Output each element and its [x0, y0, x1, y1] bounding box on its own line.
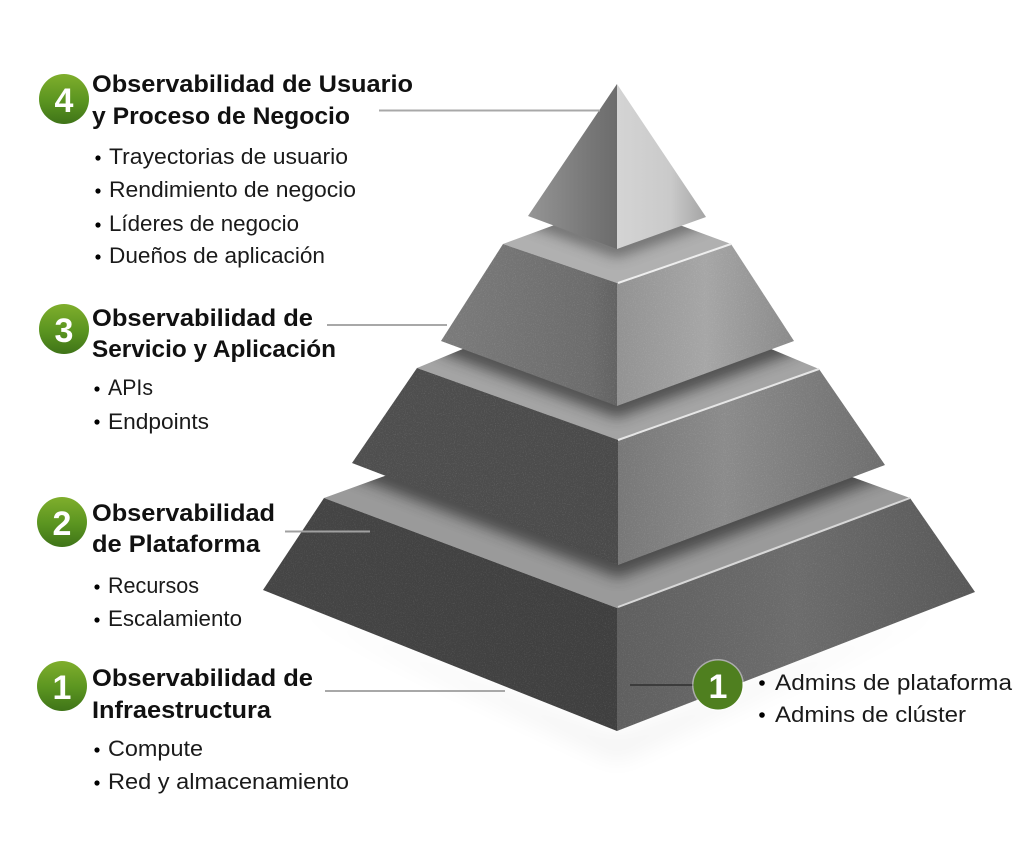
heading 3	[92, 305, 336, 363]
badge 1: 1	[53, 669, 71, 707]
tier 1: infrastructure	[263, 392, 975, 731]
heading 2	[92, 500, 275, 558]
tier 2: platform	[352, 349, 885, 565]
leader lines	[285, 110, 695, 691]
heading 1: Infraestructura	[92, 697, 272, 724]
heading 4: Observabilidad de Usuario	[92, 71, 413, 98]
heading 4	[92, 71, 413, 130]
list 2: Escalamiento	[108, 606, 242, 631]
list 3	[94, 375, 209, 434]
heading 2: Observabilidad	[92, 500, 275, 527]
badge 2: 2	[53, 505, 71, 543]
admin list: Admins de clúster	[775, 702, 966, 727]
badge 4: 4	[55, 82, 74, 120]
badge 2	[37, 497, 87, 547]
list 4	[95, 144, 356, 268]
tier 4: user and business apex	[528, 84, 706, 249]
badge 3: 3	[55, 312, 73, 350]
admin list: Admins de plataforma	[775, 670, 1013, 695]
badge 4	[39, 74, 89, 124]
list 4: Trayectorias de usuario	[109, 144, 348, 169]
list 4: Líderes de negocio	[109, 211, 299, 236]
heading 2: de Plataforma	[92, 531, 261, 558]
heading 1: Observabilidad de	[92, 665, 313, 692]
callout: tier 1 administrators	[692, 659, 1013, 727]
badge 3	[39, 304, 89, 354]
admin list	[759, 670, 1013, 727]
section 3: service and application observability	[39, 304, 336, 434]
pyramid	[263, 84, 975, 760]
list 3: Endpoints	[108, 409, 209, 434]
heading 4: y Proceso de Negocio	[92, 103, 350, 130]
heading 3: Servicio y Aplicación	[92, 336, 336, 363]
list 4: Rendimiento de negocio	[109, 177, 356, 202]
heading 3: Observabilidad de	[92, 305, 313, 332]
list 2	[94, 573, 242, 631]
list 2: Recursos	[108, 573, 199, 598]
list 3: APIs	[108, 375, 153, 400]
section 1: infrastructure observability	[37, 661, 349, 794]
tier 3: service	[441, 226, 794, 406]
badge 1	[37, 661, 87, 711]
badge 1 right	[692, 659, 744, 711]
list 1	[94, 736, 349, 794]
list 1: Red y almacenamiento	[108, 769, 349, 794]
list 1: Compute	[108, 736, 203, 761]
badge 1 right: 1	[709, 668, 727, 706]
list 4: Dueños de aplicación	[109, 243, 325, 268]
ground shadow	[275, 600, 965, 760]
heading 1	[92, 665, 313, 724]
section 4: user and business process observability	[39, 71, 413, 268]
section 2: platform observability	[37, 497, 275, 631]
